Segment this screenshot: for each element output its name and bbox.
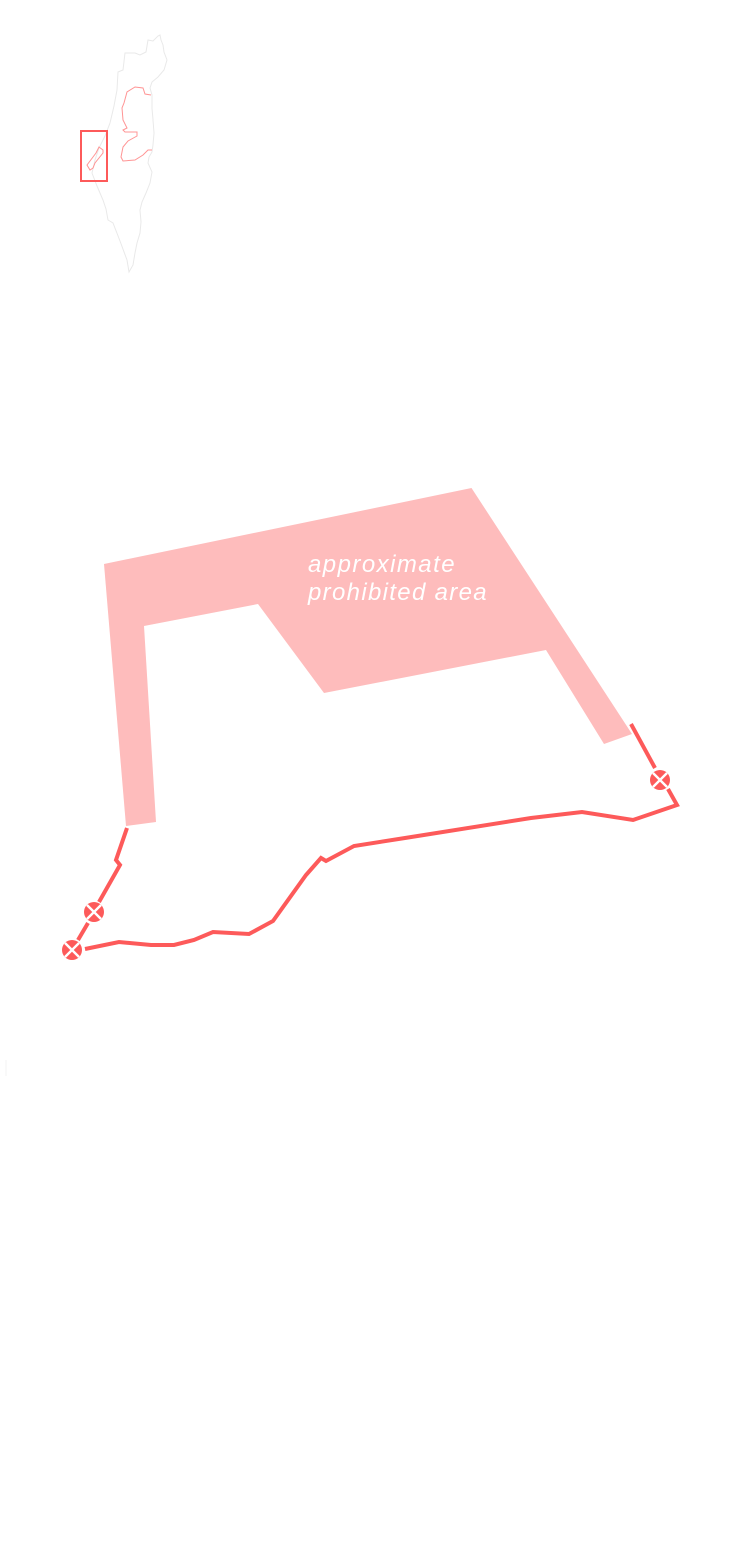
locator map xyxy=(81,35,167,272)
crossing marker: south-west xyxy=(62,940,82,960)
crossing marker: east xyxy=(650,770,670,790)
gaza outline xyxy=(87,147,103,170)
faint mark at left edge xyxy=(5,1060,7,1076)
prohibited area shape xyxy=(104,488,632,826)
country outline xyxy=(92,35,167,272)
prohibited area label: approximate xyxy=(308,551,456,578)
locator rectangle xyxy=(81,131,107,181)
west bank outline xyxy=(121,87,152,161)
prohibited area label: prohibited area xyxy=(307,579,488,606)
border fence line xyxy=(78,724,677,949)
crossing marker: north-west xyxy=(84,902,104,922)
